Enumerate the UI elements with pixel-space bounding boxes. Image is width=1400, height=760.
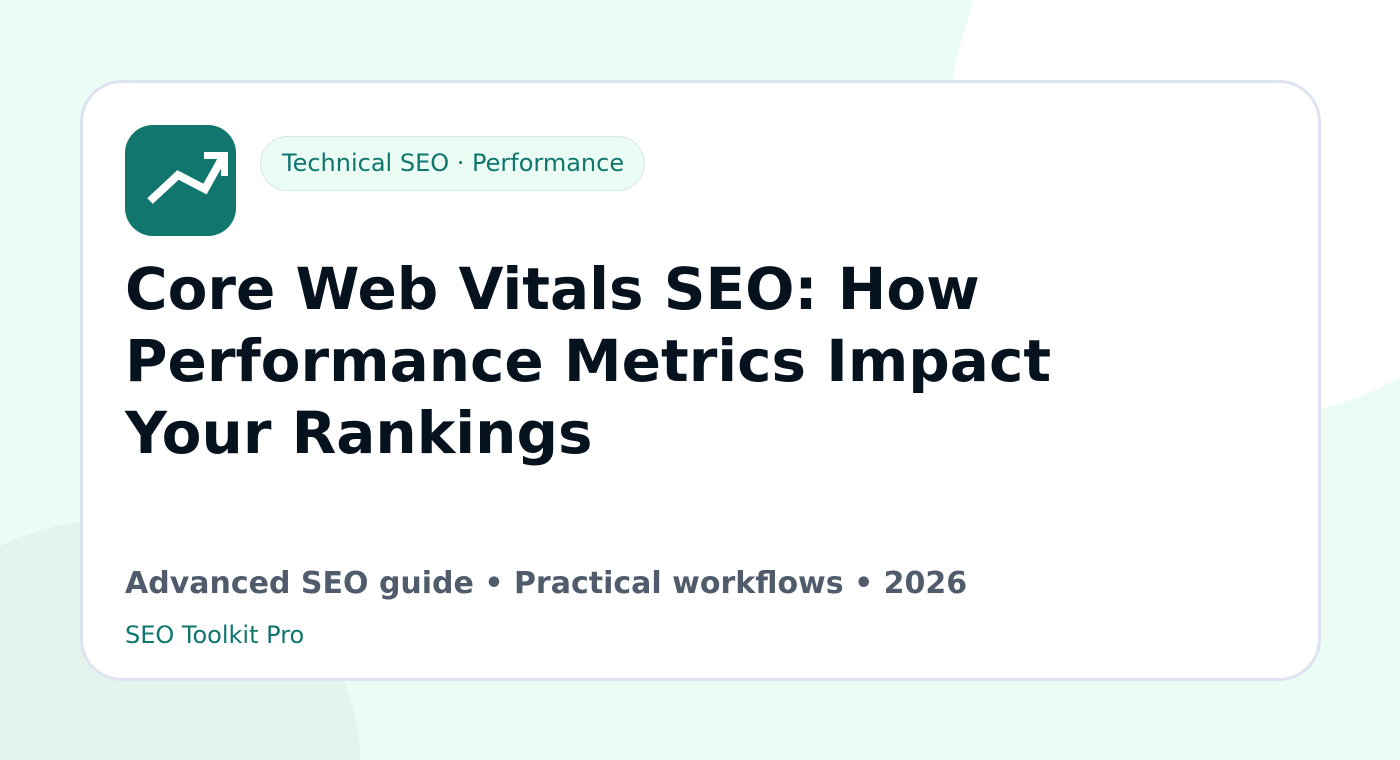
category pill [260,136,645,191]
category pill: Technical SEO · Performance [282,149,624,177]
title: Core Web Vitals SEO: How [125,255,980,323]
panel: main card [80,80,1321,681]
title: Performance Metrics Impact [125,327,1051,395]
title [124,255,1051,467]
subtitle: Advanced SEO guide • Practical workflows • 2026 [125,566,967,601]
brand name: SEO Toolkit Pro [125,621,304,649]
icon: trending chart arrow [125,125,236,236]
title: Your Rankings [125,399,592,467]
